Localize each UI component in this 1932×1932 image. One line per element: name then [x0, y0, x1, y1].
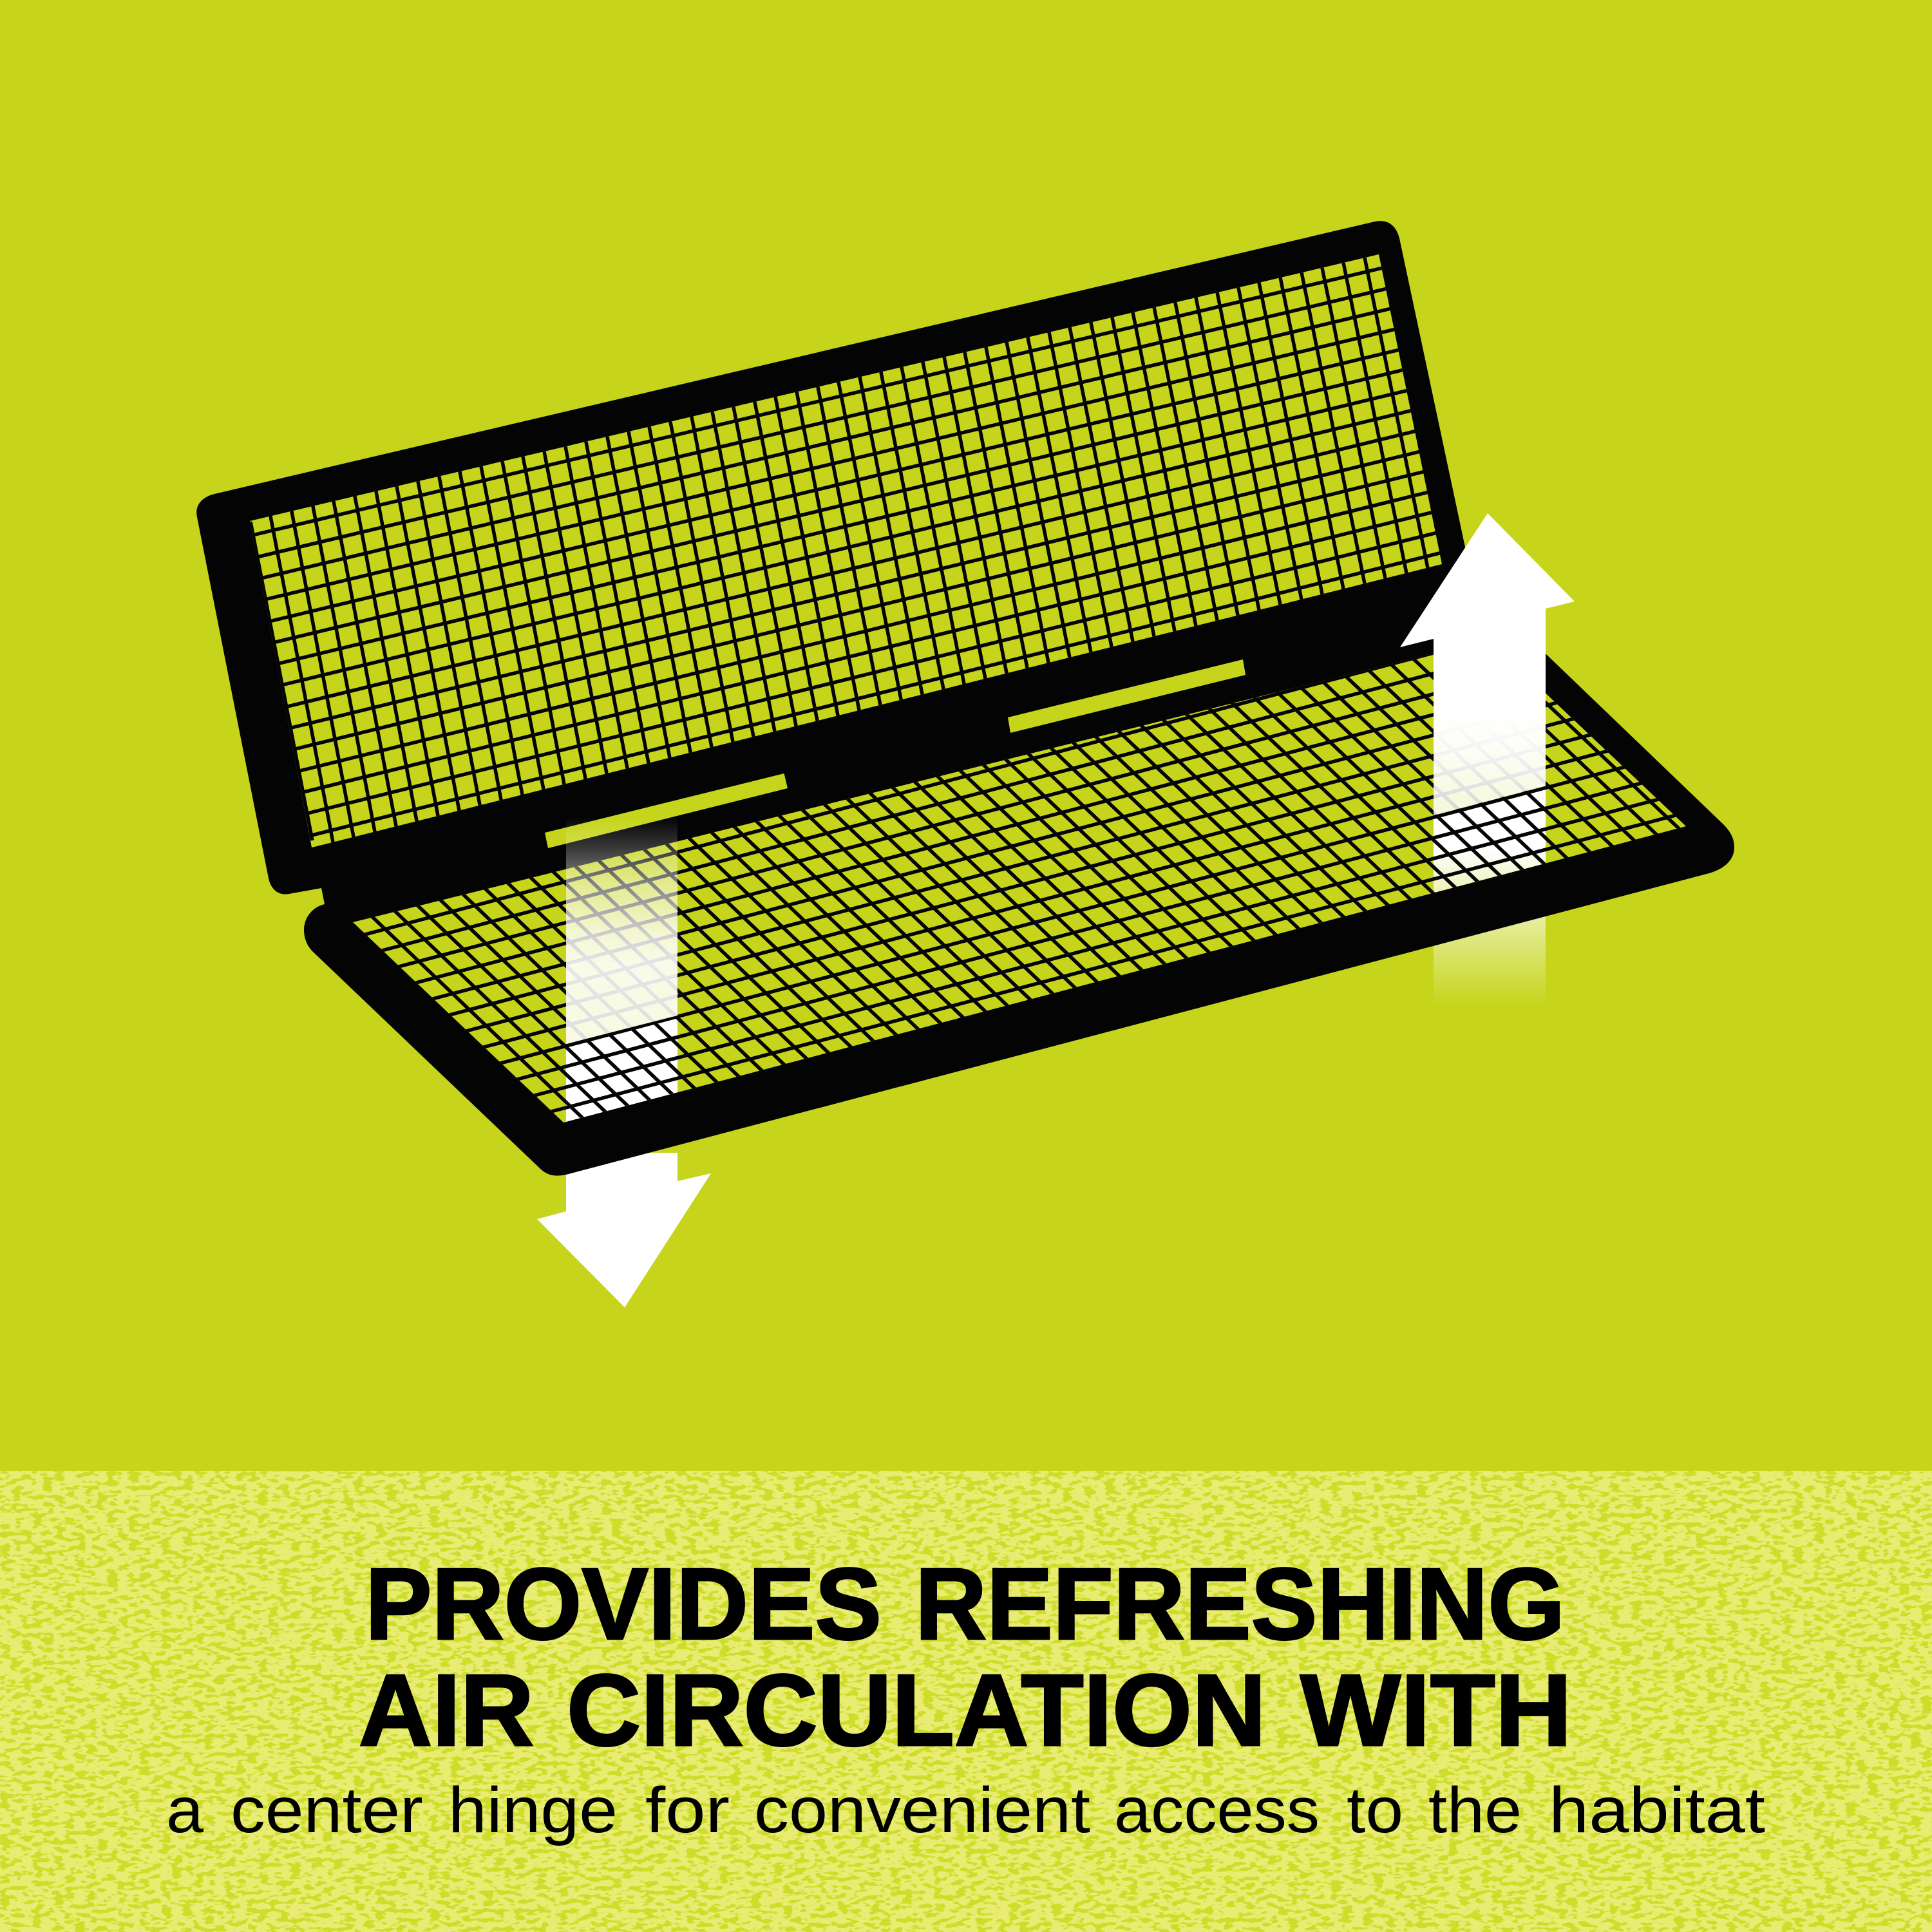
subheading: access	[1114, 1774, 1320, 1846]
hinge slot: left	[545, 773, 788, 848]
headline line 2: AIR	[359, 1654, 534, 1767]
white air cells: left	[566, 1019, 677, 1122]
arrow: fading shaft of down arrow	[566, 817, 677, 1044]
headline line 1: PROVIDES	[365, 1548, 882, 1661]
headline line 1: REFRESHING	[915, 1548, 1565, 1661]
subheading	[166, 1774, 1765, 1846]
subheading: to	[1347, 1774, 1403, 1846]
subheading: the	[1428, 1774, 1522, 1846]
arrow: head of down arrow	[537, 1153, 711, 1307]
mesh lines	[353, 636, 1685, 1123]
headline	[359, 1548, 1572, 1767]
headline line 2	[359, 1654, 1572, 1767]
lower mesh panel	[353, 653, 1686, 1122]
hinged frame	[196, 221, 1734, 1176]
headline line 1	[365, 1548, 1565, 1661]
headline line 2: WITH	[1300, 1654, 1572, 1767]
subheading: a	[166, 1774, 204, 1846]
subheading: habitat	[1549, 1774, 1765, 1846]
textured text band	[0, 1471, 1932, 1932]
subheading: for	[645, 1774, 730, 1846]
arrow: up arrow	[1400, 513, 1575, 815]
hinge slot: right	[1008, 659, 1245, 733]
white air cells: right	[1434, 786, 1546, 893]
subheading: convenient	[754, 1774, 1090, 1846]
subheading: center	[231, 1774, 423, 1846]
headline line 2: CIRCULATION	[567, 1654, 1266, 1767]
arrow: faded tail of up arrow below frame	[1434, 902, 1546, 1005]
subheading: hinge	[448, 1774, 618, 1846]
upper mesh panel	[239, 251, 1452, 849]
background	[0, 0, 1932, 1471]
